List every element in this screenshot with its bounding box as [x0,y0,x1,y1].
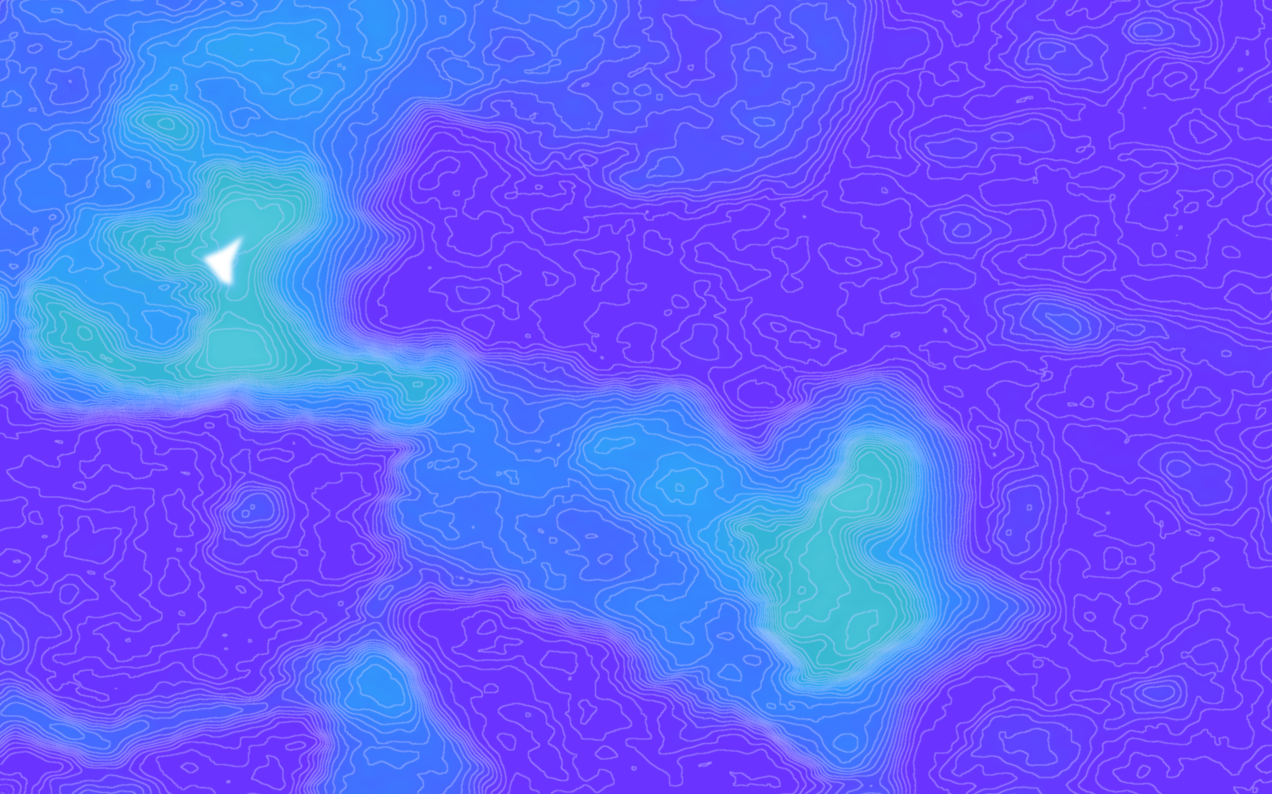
elevation: upper left plateau [0,0,620,440]
white summit with halo [198,232,246,290]
elevation: top middle plateau [420,0,880,190]
elevation: lower left ridge [0,650,440,760]
elevation: central lower plateau [300,380,1060,794]
elevation: right band [930,300,1260,370]
elevation: small teal peak [150,110,200,152]
elevation: lower teal summit [745,415,938,665]
elevation: upper left strong blue [20,0,470,420]
elevation: lower centre strong blue [580,410,950,680]
elevation: top right ripples [900,40,1250,790]
elevation: upper teal summit ridge [20,172,460,415]
elevation: lower ridge strong blue [300,640,430,720]
